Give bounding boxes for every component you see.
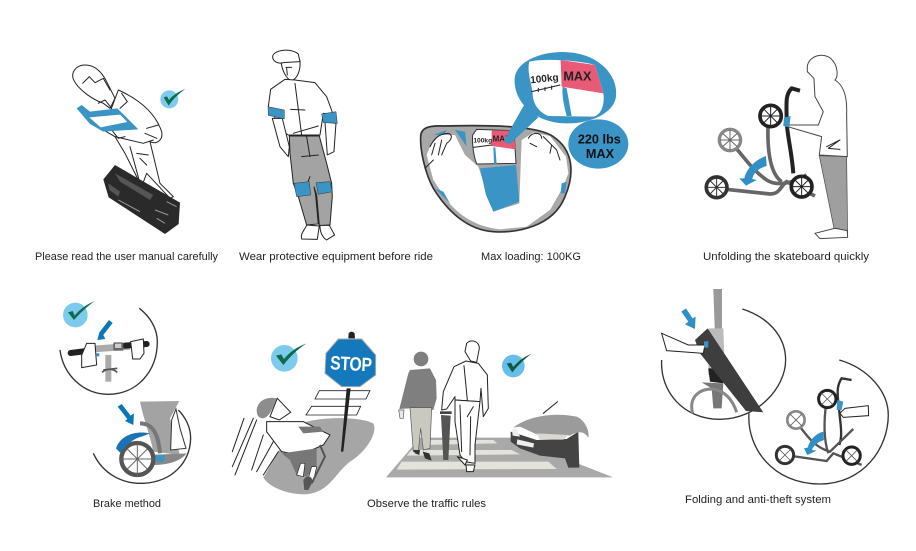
circle: folding latch detail bbox=[662, 309, 786, 419]
panel: traffic rules bbox=[232, 332, 376, 494]
product box bbox=[103, 165, 180, 234]
arrow: rear brake bbox=[118, 404, 134, 425]
road crossing bbox=[386, 438, 613, 477]
circle: folding scooter detail bbox=[749, 360, 888, 484]
road shadow under rider bbox=[263, 418, 374, 494]
illustration: scale with feet: 100kg bbox=[473, 137, 492, 144]
panel: brake and traffic left bbox=[60, 301, 191, 483]
scooter: folded positions bbox=[706, 105, 815, 198]
callout: 220 lbs badge bbox=[568, 119, 628, 169]
caption: unfolding: Unfolding the skateboard quickly bbox=[703, 251, 870, 263]
illustration: pedestrian from back bbox=[399, 352, 437, 461]
callout: 220 lbs badge: 220 lbs bbox=[578, 132, 621, 146]
icon: stop sign bbox=[325, 332, 376, 452]
callout: magnified scale: 100kg bbox=[530, 72, 559, 86]
icon: check mark bbox=[271, 343, 307, 372]
arrow: brake lever bbox=[97, 320, 113, 340]
circle: handlebar detail bbox=[60, 308, 157, 394]
caption: protective equipment: Wear protective equipment before ride bbox=[239, 251, 433, 263]
illustration: man unfolding scooter bbox=[786, 55, 848, 239]
callout: 220 lbs badge: MAX bbox=[586, 147, 615, 161]
callout: magnified scale: MAX bbox=[563, 70, 592, 84]
icon: check mark bbox=[63, 301, 95, 327]
illustration: folding scooter bbox=[776, 378, 869, 465]
caption: folding system: Folding and anti-theft system bbox=[685, 494, 831, 506]
caption: traffic rules: Observe the traffic rules bbox=[367, 498, 487, 510]
arrow: press latch bbox=[681, 308, 696, 329]
illustration: rider seen from above bbox=[257, 398, 330, 490]
circle: brake detail bbox=[93, 410, 191, 483]
icon: stop sign: STOP bbox=[330, 353, 373, 376]
icon: check mark bbox=[502, 354, 532, 377]
illustration: man bending to read manual bbox=[73, 65, 173, 198]
caption: max loading: Max loading: 100KG bbox=[481, 251, 581, 263]
caption: brake method: Brake method bbox=[93, 498, 161, 510]
caption: read the manual: Please read the user manual carefully bbox=[35, 251, 218, 263]
crosswalk stripes bbox=[306, 391, 370, 415]
arrow: unfold direction bbox=[739, 156, 767, 186]
callout: magnified scale bbox=[503, 52, 616, 144]
illustration: scale with feet: MAX bbox=[493, 135, 511, 144]
panel: pedestrians and car bbox=[386, 289, 888, 484]
illustration: handlebar with hands bbox=[71, 339, 147, 382]
illustration: man with folded scooter bbox=[440, 341, 488, 472]
panel: protective equipment man bbox=[268, 50, 337, 240]
illustration: scale with feet bbox=[421, 126, 571, 232]
arrow: folding direction bbox=[804, 432, 824, 455]
panel: max loading bbox=[421, 52, 848, 239]
icon: check mark bbox=[160, 89, 185, 108]
illustration: rear wheel and brake bbox=[116, 401, 187, 477]
icon: blue manual bbox=[77, 105, 138, 132]
illustration: car bbox=[511, 402, 589, 468]
illustration: folding latch bbox=[662, 289, 763, 413]
panel: read the manual bbox=[73, 50, 337, 240]
